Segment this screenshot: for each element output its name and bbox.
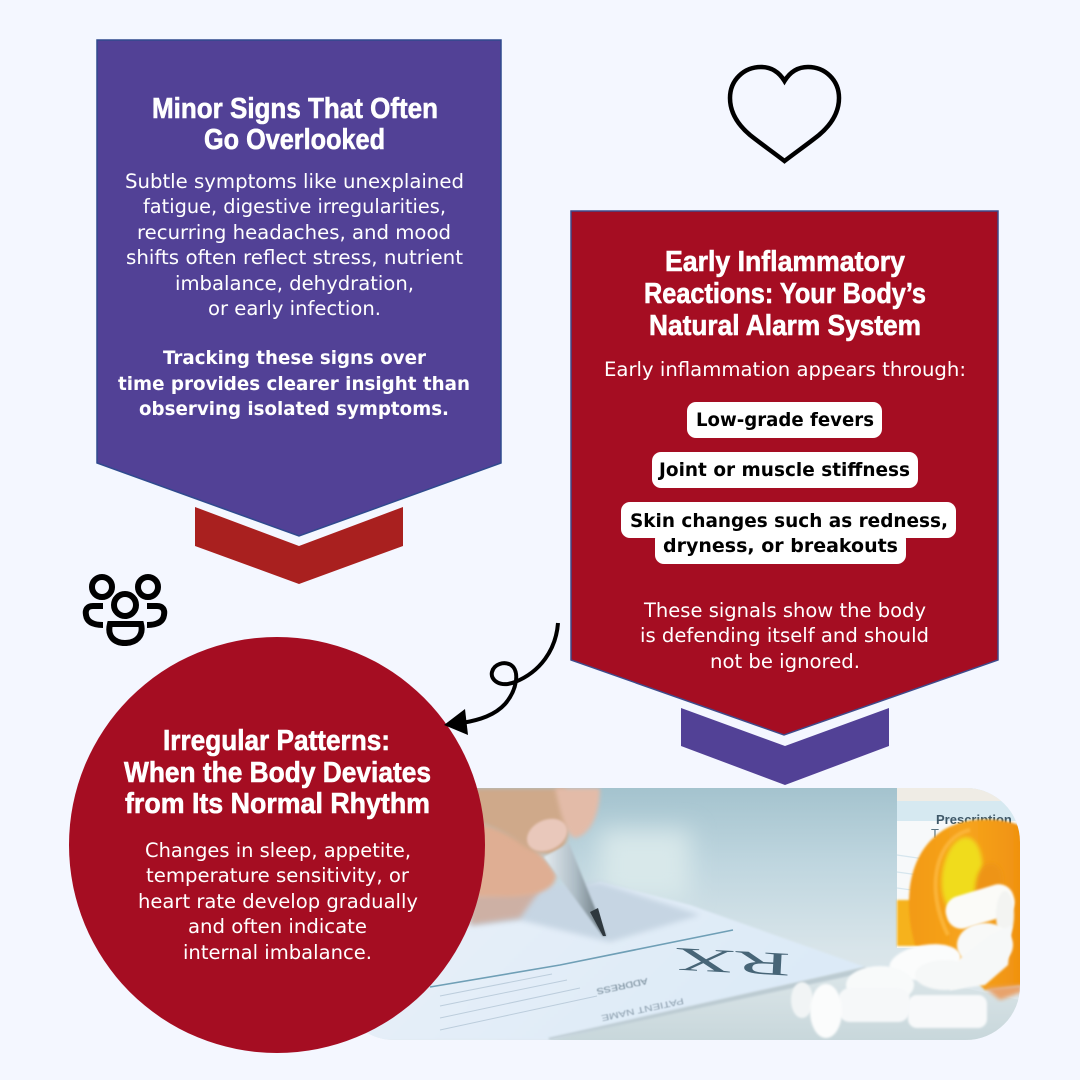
text: irregular patterns description bbox=[138, 839, 418, 964]
text: irregular patterns description: and often indicate bbox=[188, 915, 367, 938]
photo: prescription pad, pen and spilled pills: RX bbox=[673, 940, 791, 982]
arrow: loop to circle bbox=[444, 623, 558, 735]
text: irregular patterns description: temperature sensitivity, or bbox=[146, 864, 410, 887]
text: symptoms description: recurring headaches, and mood bbox=[137, 221, 451, 244]
text: closing note: These signals show the body bbox=[643, 599, 926, 622]
text: symptoms description: imbalance, dehydration, bbox=[175, 272, 414, 295]
icon: heart bbox=[730, 67, 839, 161]
heading: minor signs: Go Overlooked bbox=[204, 124, 385, 156]
text: closing note bbox=[640, 599, 929, 673]
text: symptoms description: or early infection. bbox=[208, 297, 381, 320]
photo: prescription pad, pen and spilled pills: PATIENT NAME bbox=[600, 996, 684, 1022]
heading: minor signs: Minor Signs That Often bbox=[152, 93, 438, 125]
pill: skin changes: dryness, or breakouts bbox=[663, 535, 898, 557]
photo: prescription pad, pen and spilled pills: T bbox=[931, 826, 939, 841]
text: tracking advice bbox=[118, 347, 470, 420]
panel: minor signs bbox=[97, 40, 501, 536]
panel: irregular patterns bbox=[69, 637, 485, 1053]
heading: early inflammatory reactions: Reactions: Your Body’s bbox=[644, 278, 926, 310]
heading: early inflammatory reactions bbox=[644, 246, 926, 342]
text: intro line: Early inflammation appears through: bbox=[604, 358, 966, 381]
heading: minor signs bbox=[152, 93, 438, 156]
pill: skin changes bbox=[621, 502, 956, 564]
text: symptoms description: shifts often reflect stress, nutrient bbox=[126, 246, 463, 269]
icon: people group bbox=[86, 577, 164, 643]
text: irregular patterns description: Changes in sleep, appetite, bbox=[145, 839, 411, 862]
photo: prescription pad, pen and spilled pills: Prescription bbox=[936, 812, 1012, 827]
text: irregular patterns description: heart rate develop gradually bbox=[138, 890, 418, 913]
heading: irregular patterns bbox=[124, 725, 431, 820]
text: tracking advice: Tracking these signs over bbox=[163, 347, 427, 369]
panel: early inflammatory reactions bbox=[571, 211, 998, 735]
chevron: red bbox=[195, 507, 403, 584]
text: symptoms description: Subtle symptoms like unexplained bbox=[125, 170, 464, 193]
photo: prescription pad, pen and spilled pills bbox=[340, 788, 1025, 1040]
heading: early inflammatory reactions: Natural Alarm System bbox=[649, 310, 921, 342]
pill: joint or muscle stiffness bbox=[652, 452, 918, 488]
heading: irregular patterns: Irregular Patterns: bbox=[163, 725, 390, 757]
pill: low-grade fevers bbox=[687, 402, 882, 438]
photo: prescription pad, pen and spilled pills: ADDRESS bbox=[596, 976, 648, 996]
text: closing note: is defending itself and should bbox=[640, 624, 929, 647]
text: symptoms description: fatigue, digestive irregularities, bbox=[143, 195, 446, 218]
chevron: purple bbox=[681, 708, 889, 785]
heading: irregular patterns: from Its Normal Rhythm bbox=[125, 788, 430, 820]
text: tracking advice: observing isolated symptoms. bbox=[139, 398, 449, 420]
text: irregular patterns description: internal imbalance. bbox=[183, 941, 372, 964]
heading: irregular patterns: When the Body Deviates bbox=[124, 757, 431, 789]
pill: skin changes: Skin changes such as redness, bbox=[630, 510, 948, 532]
pill: low-grade fevers: Low-grade fevers bbox=[696, 409, 874, 431]
text: symptoms description bbox=[125, 170, 464, 320]
heading: early inflammatory reactions: Early Inflammatory bbox=[665, 246, 905, 278]
text: tracking advice: time provides clearer insight than bbox=[118, 373, 470, 395]
pill: joint or muscle stiffness: Joint or muscle stiffness bbox=[657, 459, 910, 481]
text: closing note: not be ignored. bbox=[710, 650, 860, 673]
